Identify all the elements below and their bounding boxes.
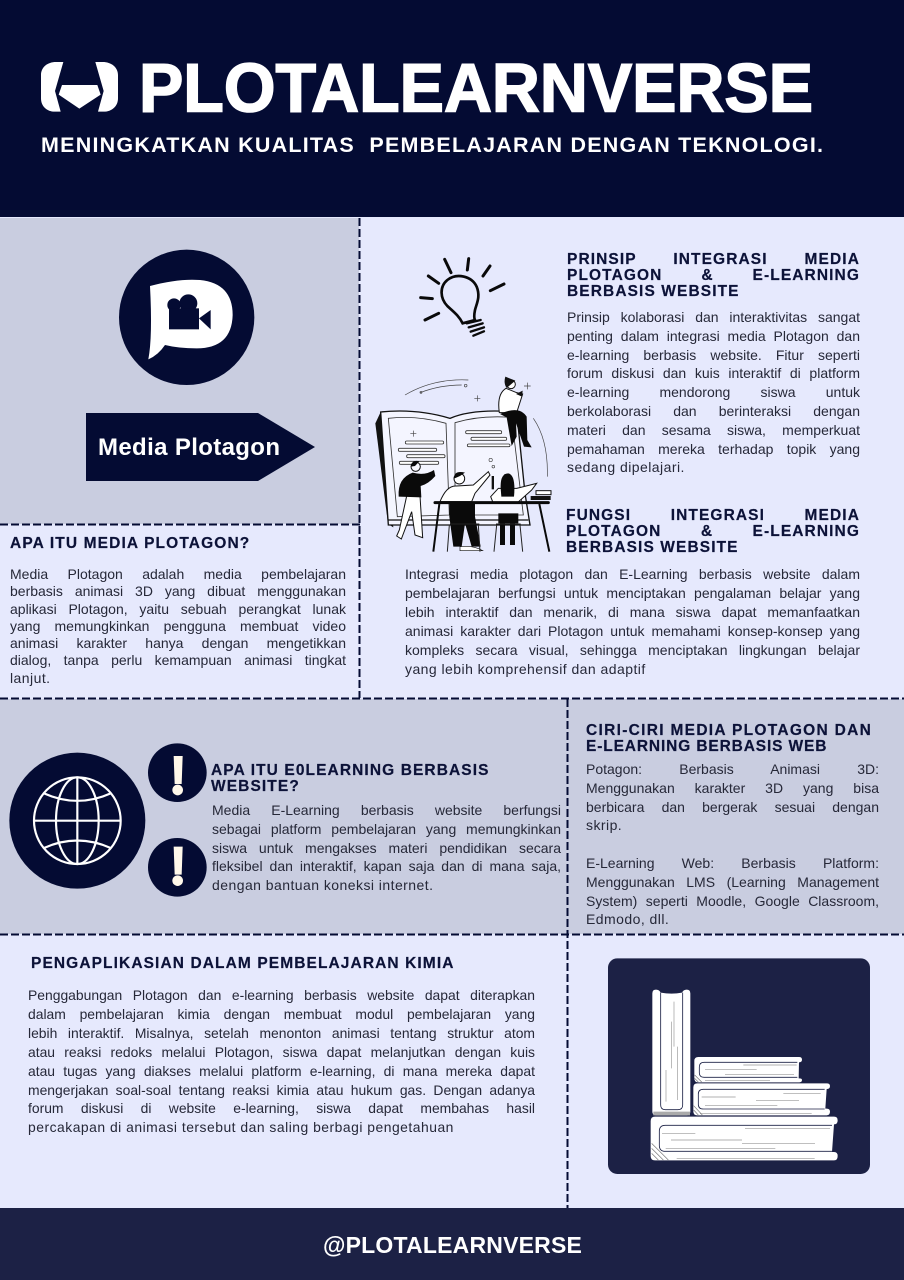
icon: exclamation top	[148, 743, 207, 802]
text: characteristics body: Edmodo, dll.	[586, 911, 669, 927]
text: characteristics body: berbicara dan bergerak sesuai dengan	[586, 799, 879, 815]
text: functions body: yang lebih komprehensif dan adaptif	[405, 661, 646, 677]
text: functions body: lebih interaktif dan menarik, di mana siswa dapat memanfaatkan	[405, 604, 860, 620]
person: seated student	[440, 472, 490, 551]
text: characteristics body: E-Learning Web: Berbasis Platform:	[586, 855, 879, 871]
heading: functions: FUNGSI INTEGRASI MEDIA	[566, 507, 860, 524]
text: e-learning body: dengan bantuan koneksi internet.	[212, 877, 433, 893]
text: characteristics body: Menggunakan LMS (Learning Management	[586, 874, 879, 890]
panel: plotagon intro	[0, 218, 359, 524]
text: functions body: animasi karakter dari Plotagon untuk memahami konsep-konsep yang	[405, 623, 860, 639]
text: what is plotagon body	[10, 566, 346, 686]
heading: chemistry application: PENGAPLIKASIAN DALAM PEMBELAJARAN KIMIA	[31, 955, 455, 972]
text: what is plotagon body: lanjut.	[10, 670, 51, 686]
title: PLOTALEARNVERSE	[139, 50, 813, 126]
text: chemistry body: Penggabungan Plotagon dan e-learning berbasis website dapat diterapkan	[28, 987, 535, 1003]
heading: what is e-learning	[210, 762, 490, 795]
desk with books	[433, 491, 551, 552]
text: principles body: Prinsip kolaborasi dan interaktivitas sangat	[567, 309, 860, 325]
icon: plotagon logo	[119, 250, 254, 385]
text: principles body: berkolaborasi dan berinteraksi dengan	[567, 403, 860, 419]
text: functions body: kompleks secara visual, sehingga menciptakan lingkungan belajar	[405, 642, 860, 658]
heading: what is e-learning: APA ITU E0LEARNING BERBASIS	[211, 762, 490, 779]
text: what is plotagon body: yang memungkinkan pengguna membuat video	[10, 618, 346, 634]
person: student on top of book	[499, 377, 532, 447]
heading: functions: PLOTAGON & E-LEARNING	[566, 523, 860, 540]
text: chemistry body: lebih interaktif. Misalnya, setelah menonton animasi tentang struktur atom	[28, 1025, 535, 1041]
footer handle: @PLOTALEARNVERSE	[323, 1232, 582, 1258]
text: what is plotagon body: animasi karakter hanya dengan mengetikkan	[10, 635, 346, 651]
panel: footer band	[0, 1208, 904, 1280]
text: what is plotagon body: dialog, tanpa perlu kemampuan animasi tingkat	[10, 652, 346, 668]
text: principles body: forum diskusi dan kuis interaktif di platform	[567, 365, 860, 381]
person: standing student	[397, 461, 435, 539]
text: functions body: Integrasi media plotagon dan E-Learning berbasis website dalam	[405, 566, 860, 582]
text: functions body	[405, 566, 860, 677]
heading: principles	[567, 251, 860, 300]
text: characteristics body: Potagon: Berbasis Animasi 3D:	[586, 761, 879, 777]
text: chemistry body: atau reaksi redoks melalui Plotagon, siswa dapat melanjutkan dengan kuis	[28, 1044, 535, 1060]
text: characteristics body: skrip.	[586, 817, 622, 833]
subtitle: MENINGKATKAN KUALITAS PEMBELAJARAN DENGAN TEKNOLOGI.	[41, 133, 823, 157]
text: principles body: materi dan sesama siswa, memperkuat	[567, 422, 860, 438]
text: chemistry body: dalam pembelajaran kimia dengan membuat modul pembelajaran yang	[28, 1006, 535, 1022]
heading: functions	[566, 507, 860, 556]
text: what is plotagon body: berbasis animasi 3D yang dibuat menggunakan	[10, 583, 346, 599]
heading: principles: PRINSIP INTEGRASI MEDIA	[567, 251, 860, 268]
heading: characteristics: E-LEARNING BERBASIS WEB	[586, 738, 827, 755]
person: student with long hair	[491, 465, 537, 545]
text: e-learning body: Media E-Learning berbasis website berfungsi	[212, 802, 561, 818]
text: chemistry body: percakapan di animasi tersebut dan saling berbagi pengetahuan	[28, 1119, 454, 1135]
text: principles body: e-learning berbasis website. Fitur seperti	[567, 347, 860, 363]
text: characteristics body: System) seperti Moodle, Google Classroom,	[586, 893, 879, 909]
text: what is plotagon body: Media Plotagon adalah media pembelajaran	[10, 566, 346, 582]
text: e-learning body	[212, 802, 562, 893]
text: chemistry body	[28, 987, 535, 1135]
arrow label: Media Plotagon	[86, 413, 315, 481]
heading: principles: BERBASIS WEBSITE	[567, 283, 740, 300]
text: chemistry body: atau tugas yang diakses melalui platform e-learning, di mana mereka dapat	[28, 1063, 535, 1079]
text: what is plotagon body: aplikasi Plotagon, yaitu sebuah perangkat lunak	[10, 601, 346, 617]
text: principles body	[567, 309, 860, 475]
icon: exclamation bottom	[148, 838, 207, 897]
text: principles body: e-learning mendorong siswa untuk	[567, 384, 860, 400]
text: principles body: pemahaman mereka terhadap topik yang	[567, 441, 860, 457]
text: principles body: sedang dipelajari.	[567, 459, 685, 475]
icon: light bulb	[421, 259, 504, 336]
text: e-learning body: sebagai platform pembelajaran yang memungkinkan	[212, 821, 561, 837]
heading: what is e-learning: WEBSITE?	[211, 778, 300, 795]
panel: e-learning and characteristics band	[0, 699, 904, 934]
text: chemistry body: mengerjakan soal-soal tentang reaksi kimia atau hukum gas. Dengan adanya	[28, 1082, 535, 1098]
heading: functions: BERBASIS WEBSITE	[566, 539, 739, 556]
arrow label: Media Plotagon: Media Plotagon	[98, 434, 280, 461]
text: characteristics body: Menggunakan karakter 3D yang bisa	[586, 780, 879, 796]
icon: header logo	[41, 62, 118, 112]
text: characteristics body	[586, 761, 880, 927]
heading: principles: PLOTAGON & E-LEARNING	[567, 267, 860, 284]
heading: what is plotagon: APA ITU MEDIA PLOTAGON?	[10, 535, 250, 552]
text: chemistry body: forum diskusi di website e-learning, siswa dapat membahas hasil	[28, 1100, 535, 1116]
illustration: giant book with students	[375, 377, 551, 552]
heading: characteristics: CIRI-CIRI MEDIA PLOTAGON DAN	[586, 722, 872, 739]
text: principles body: penting dalam integrasi media Plotagon dan	[567, 328, 860, 344]
text: e-learning body: siswa untuk mengakses materi pendidikan secara	[212, 840, 561, 856]
text: functions body: pembelajaran berfungsi untuk menciptakan pengalaman belajar yang	[405, 585, 860, 601]
icon: globe	[9, 753, 145, 889]
icon card: stack of books	[608, 958, 870, 1174]
text: e-learning body: fleksibel dan interaktif, kapan saja dan di mana saja,	[212, 858, 561, 874]
heading: characteristics	[586, 722, 872, 755]
panel: header band	[0, 0, 904, 217]
